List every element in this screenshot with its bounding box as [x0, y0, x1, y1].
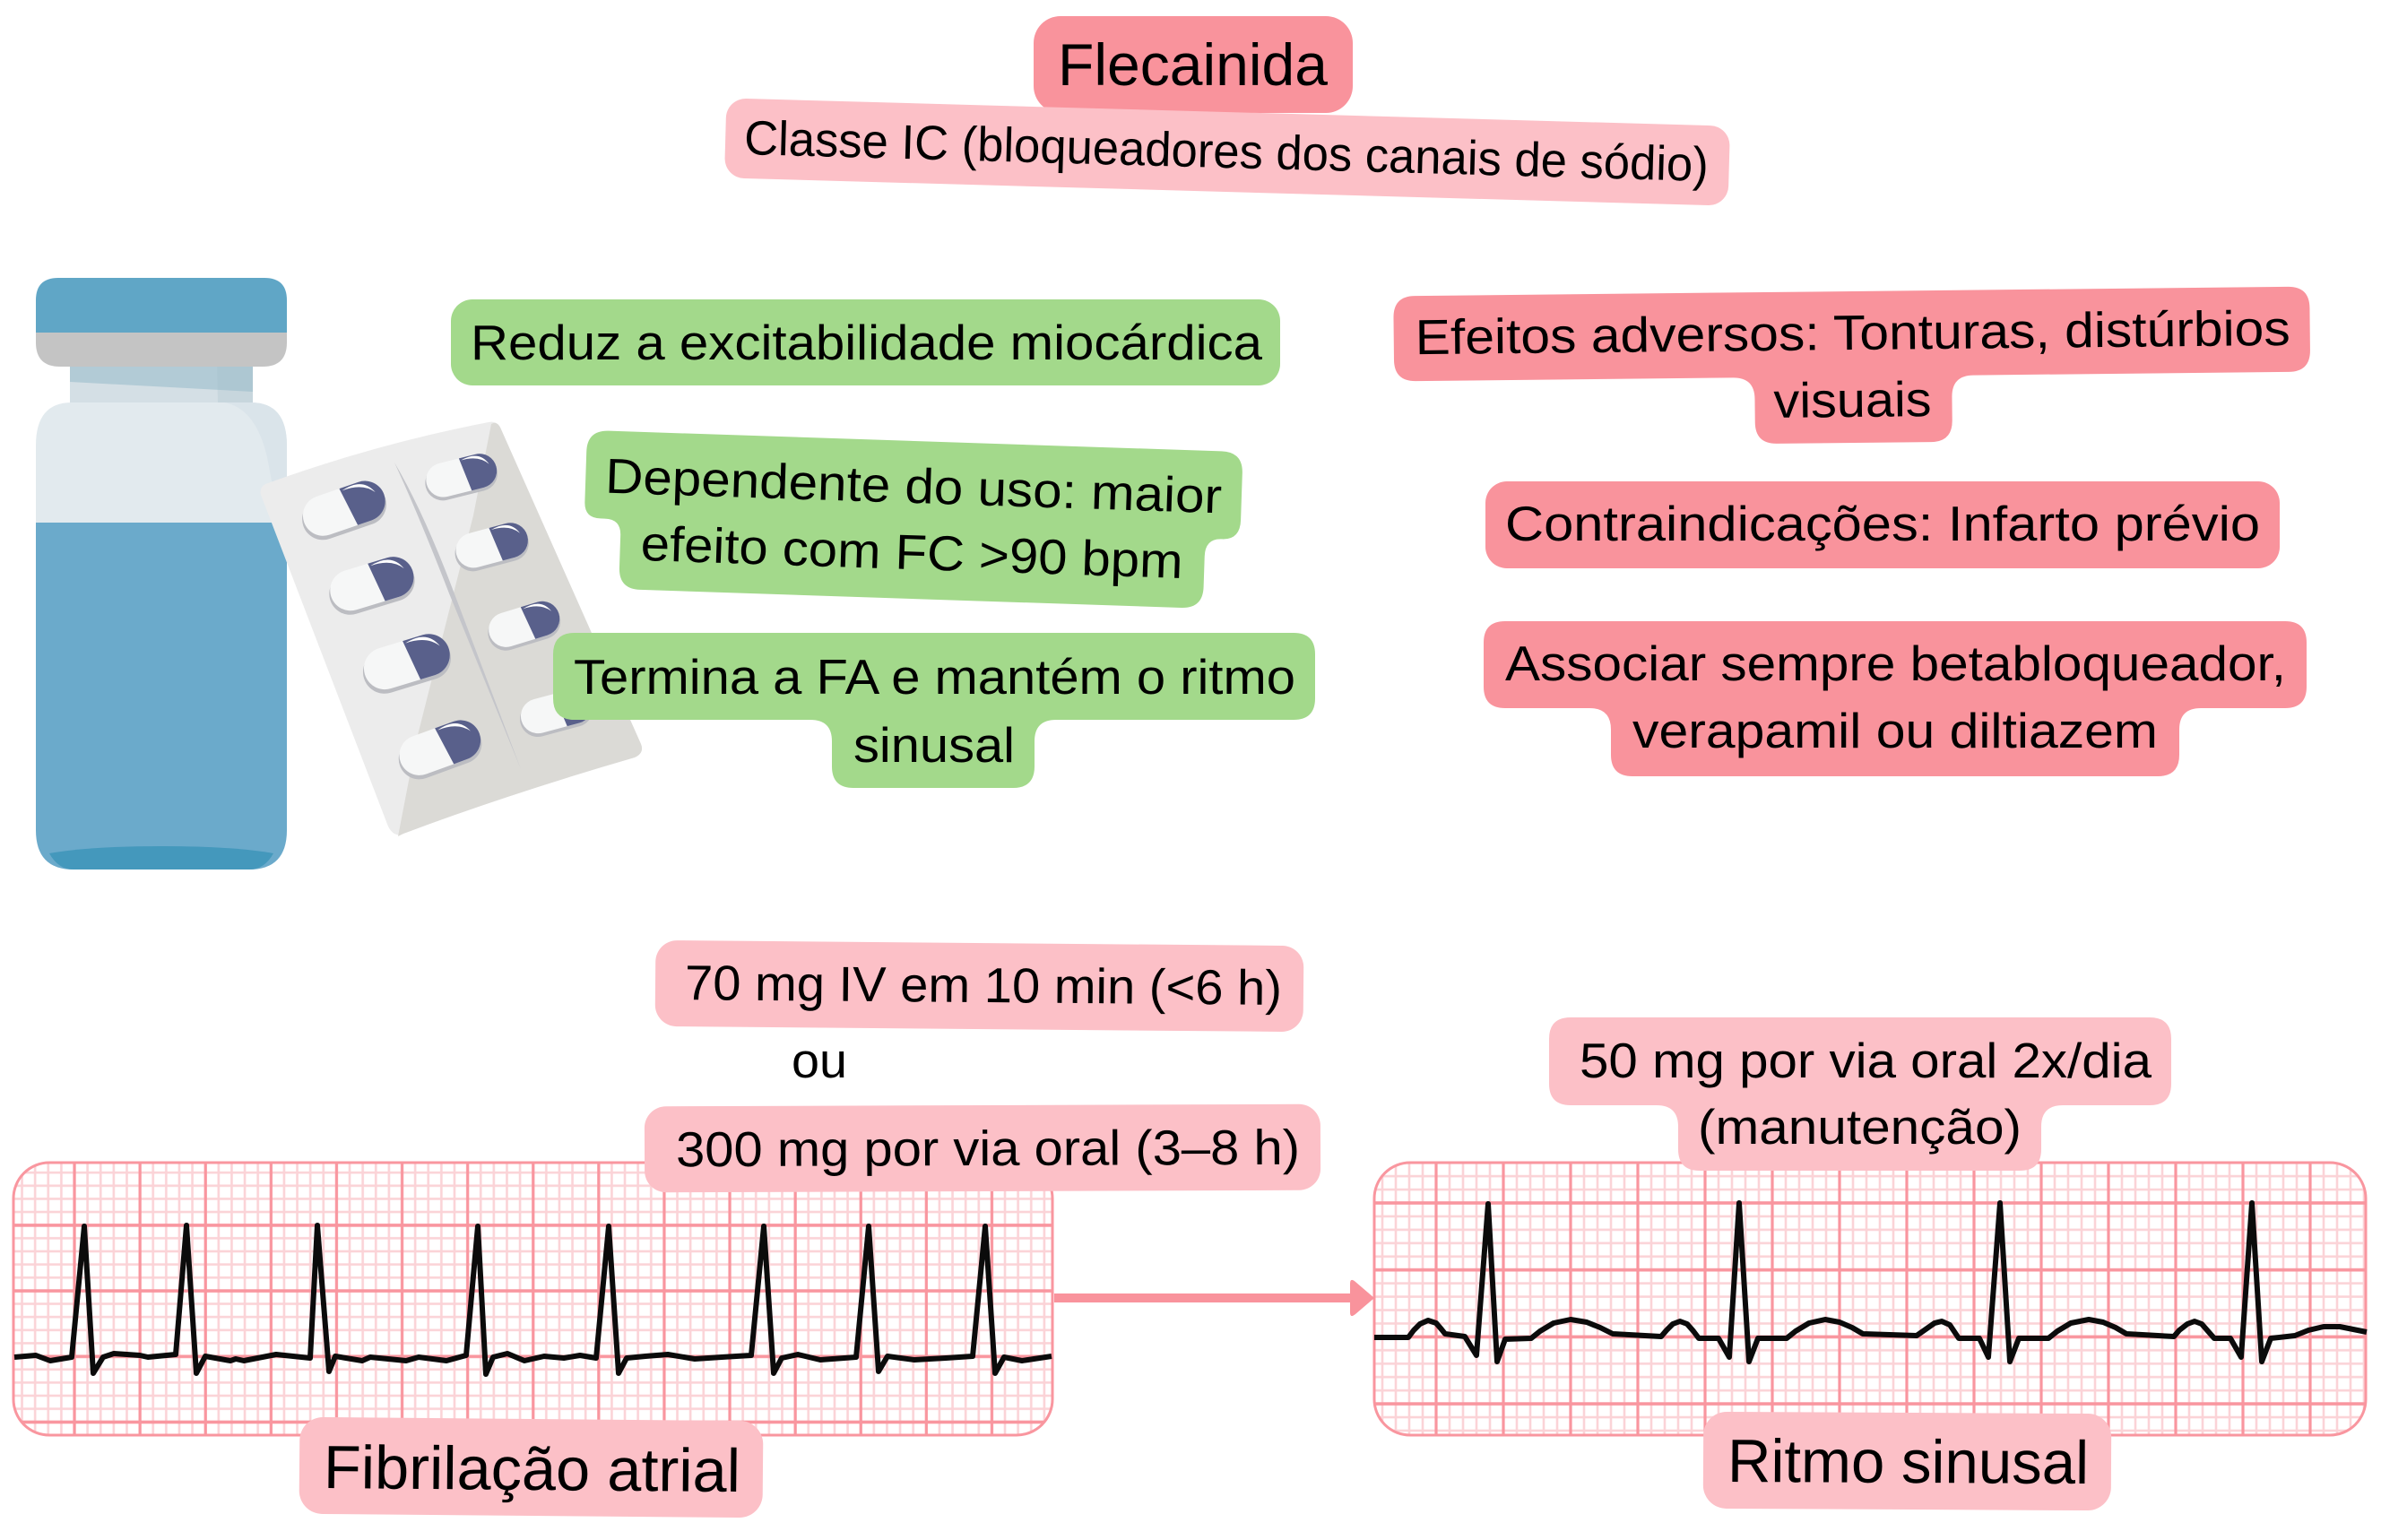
callout: adverse effects	[1393, 287, 2311, 447]
dose: oral maintenance: (manutenção)	[1698, 1099, 2022, 1155]
label: atrial fibrillation	[299, 1417, 763, 1518]
callout: use dependence	[582, 430, 1243, 610]
blister shaded side	[398, 423, 642, 836]
pill 4	[324, 551, 420, 620]
subtitle: drug class: Classe IC (bloqueadores dos canais de sódio)	[743, 111, 1710, 192]
illustration: medicine vial	[36, 278, 287, 869]
dose: oral maintenance	[1549, 1017, 2171, 1171]
pill 1	[296, 475, 392, 546]
pill 6	[357, 628, 456, 699]
callout: use dependence: Dependente do uso: maior	[604, 448, 1223, 523]
title: Flecainida: Flecainida	[1058, 31, 1328, 98]
dose: intravenous: 70 mg IV em 10 min (<6 h)	[685, 955, 1282, 1016]
callout: terminates AF: Termina a FA e mantém o ritmo	[574, 649, 1295, 705]
callout: terminates AF: sinusal	[853, 717, 1015, 773]
ECG trace	[1374, 1203, 2367, 1362]
callout: adverse effects: visuais	[1773, 371, 1932, 428]
callout: adverse effects: Efeitos adversos: Tonturas, distúrbios	[1415, 300, 2290, 365]
vial cap seal	[36, 333, 287, 367]
callout: associate drugs	[1484, 621, 2307, 776]
pill 2	[421, 450, 501, 504]
ECG paper grid	[1374, 1163, 2366, 1435]
label: atrial fibrillation: Fibrilação atrial	[324, 1433, 740, 1505]
ECG chart: sinus rhythm	[1374, 1163, 2367, 1435]
label: sinus rhythm: Ritmo sinusal	[1727, 1427, 2089, 1497]
callout: contraindications: Contraindicações: Infarto prévio	[1505, 496, 2260, 551]
vial neck	[70, 359, 253, 403]
vial liquid	[36, 523, 287, 869]
title: Flecainida	[1034, 16, 1353, 113]
pill 3	[450, 519, 532, 575]
vial glass body	[36, 402, 287, 538]
label: sinus rhythm	[1703, 1412, 2111, 1510]
vial glass reflection	[224, 402, 287, 538]
ECG trace	[14, 1225, 1052, 1374]
vial liquid bottom	[49, 846, 273, 869]
callout: terminates AF	[553, 633, 1315, 788]
pill 5	[483, 597, 565, 655]
ECG paper grid	[13, 1163, 1052, 1435]
dose: oral maintenance: 50 mg por via oral 2x/dia	[1580, 1033, 2152, 1088]
illustration: blister pack	[261, 422, 642, 836]
callout: use dependence: efeito com FC >90 bpm	[640, 515, 1184, 589]
connector word: ou: ou	[792, 1033, 847, 1088]
callout: contraindications	[1485, 481, 2280, 568]
dose: oral loading	[645, 1104, 1320, 1192]
blister foil	[261, 422, 642, 835]
callout: reduces excitability	[451, 299, 1280, 385]
ECG chart: atrial fibrillation	[13, 1163, 1052, 1435]
dose: oral loading: 300 mg por via oral (3–8 h)	[676, 1120, 1300, 1177]
dose: intravenous	[655, 940, 1303, 1032]
vial cap	[36, 278, 287, 333]
callout: associate drugs: verapamil ou diltiazem	[1632, 703, 2158, 758]
blister groove	[394, 463, 521, 769]
pill 8	[392, 714, 488, 785]
callout: associate drugs: Associar sempre betabloqueador,	[1505, 636, 2286, 691]
callout: reduces excitability: Reduz a excitabilidade miocárdica	[471, 315, 1262, 370]
arrow: atrial fibrillation to sinus rhythm	[1054, 1280, 1374, 1316]
pill 7	[515, 685, 597, 740]
